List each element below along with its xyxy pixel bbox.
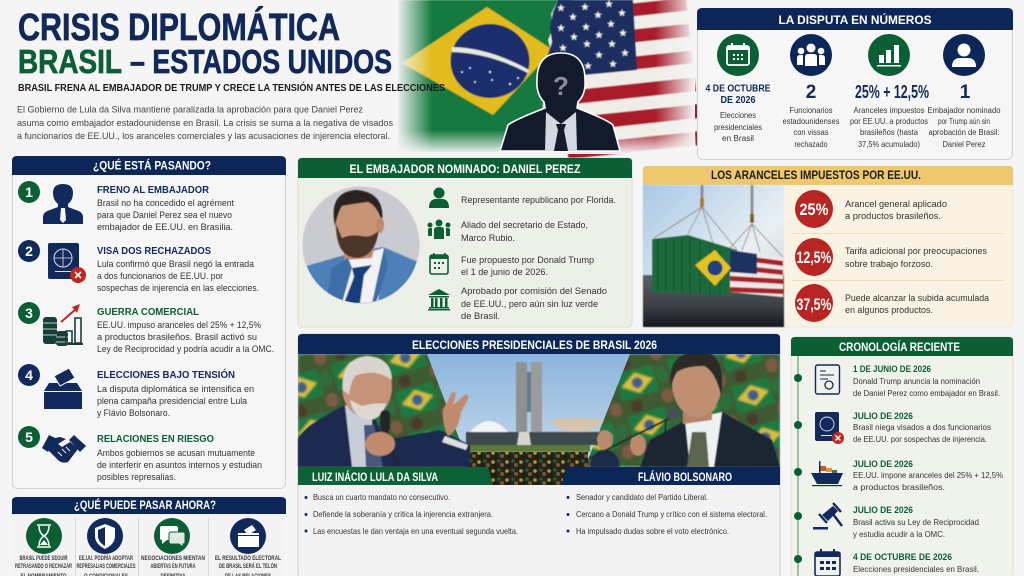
panel: qué puede pasar ahora: ¿QUÉ PUEDE PASAR AHORA?	[74, 497, 216, 512]
tariff 37,5%: Puede alcanzar la subida acumulada	[845, 293, 989, 303]
tariff 25%	[795, 190, 947, 228]
item 3: guerra comercial: EE.UU. impuso aranceles del 25% + 12,5%	[97, 320, 261, 330]
hero image: Brazil and US flags with silhouette	[396, 0, 702, 159]
title	[18, 5, 392, 80]
stat: officials	[782, 82, 840, 149]
bullets: Bolsonaro: Senador y candidato del Partido Liberal.	[576, 493, 708, 502]
stat: tariffs: por EE.UU. a productos	[850, 117, 928, 126]
item 1: freno al embajador: FRENO AL EMBAJADOR	[97, 184, 209, 196]
event: 1 de junio: de Daniel Perez como embajador en Brasil.	[853, 389, 1000, 398]
item 1: freno al embajador: embajador de EE.UU. en Brasilia.	[97, 222, 233, 232]
icon: calendar	[717, 34, 759, 76]
icon: representative	[429, 188, 449, 208]
icon: bar chart	[868, 34, 910, 76]
item 2: visados rechazados	[18, 240, 259, 293]
stat: tariffs: Aranceles impuestos	[854, 106, 924, 115]
stat: ambassador	[928, 82, 1001, 149]
stat: election date: DE 2026	[720, 94, 756, 106]
item 1: freno al embajador	[18, 181, 234, 232]
panel: embajador nominado	[298, 158, 632, 327]
panel: cronología reciente	[791, 337, 1013, 576]
portrait: Daniel Perez	[300, 186, 420, 310]
icon: nomination calendar	[430, 253, 448, 274]
event: aranceles: EE.UU. impone aranceles del 25% + 12,5%	[853, 471, 1003, 480]
fact: aprobado	[461, 286, 607, 321]
tariff 12,5%: 12,5%	[796, 248, 832, 267]
event: visados	[794, 411, 991, 444]
panel: embajador nominado: EL EMBAJADOR NOMINADO: DANIEL PEREZ	[350, 162, 580, 176]
stat: ambassador: aprobación de Brasil:	[928, 128, 1000, 137]
panel: la disputa en números	[697, 8, 1013, 160]
title: CRISIS DIPLOMÁTICA	[18, 5, 340, 49]
scenario: resultado electoral	[215, 518, 281, 576]
icon: allies group	[428, 220, 450, 239]
item 1: freno al embajador: 1	[25, 184, 33, 200]
bullets: Lula: Las encuestas le dan ventaja en una eventual segunda vuelta.	[313, 527, 518, 536]
fact: propuesto: el 1 de junio de 2026.	[461, 267, 548, 277]
item 4: elecciones bajo tensión: y Flávio Bolsonaro.	[97, 408, 170, 418]
scenario: represalias: EE.UU. PODRÍA ADOPTAR	[79, 554, 133, 562]
bullets: Lula: Defiende la soberanía y critica la injerencia extranjera.	[313, 510, 493, 519]
item 4: elecciones bajo tensión: La disputa diplomática se intensifica en	[97, 384, 254, 394]
title: – ESTADOS UNIDOS	[130, 43, 392, 80]
tariff 37,5%: en algunos productos.	[845, 305, 933, 315]
Congress building	[466, 362, 604, 452]
item 5: relaciones en riesgo: 5	[25, 429, 33, 445]
scenario: represalias	[76, 518, 136, 576]
icon: group of officials	[790, 34, 832, 76]
intro paragraph	[17, 104, 393, 142]
item 2: visados rechazados: a dos funcionarios de EE.UU. por	[97, 271, 223, 281]
scenario: negociaciones: NEGOCIACIONES MIENTAN	[141, 556, 205, 562]
event: elecciones	[794, 549, 979, 576]
panel: la disputa en números: LA DISPUTA EN NÚMEROS	[778, 12, 932, 27]
silhouette with question mark	[500, 53, 620, 151]
item 5: relaciones en riesgo: posibles represalias.	[97, 472, 176, 482]
panel: elecciones presidenciales: ELECCIONES PRESIDENCIALES DE BRASIL 2026	[412, 338, 657, 352]
event: visados: Brasil niega visados a dos funcionarios	[853, 423, 991, 432]
panel: elecciones presidenciales	[298, 334, 780, 576]
stat: tariffs: 37,5% acumulado)	[858, 140, 920, 149]
tariff 37,5%: 37,5%	[796, 295, 832, 314]
stat: election date: en Brasil	[722, 134, 754, 143]
event: elecciones: 4 DE OCTUBRE DE 2026	[853, 552, 952, 563]
scenario: retraso: BRASIL PUEDE SEGUIR	[20, 556, 68, 562]
image: containers with flags	[643, 185, 784, 327]
item 4: elecciones bajo tensión: 4	[25, 367, 33, 383]
bullets: Bolsonaro	[566, 493, 767, 536]
Brazil flag	[398, 0, 573, 152]
item 2: visados rechazados: Lula confirmó que Brasil negó la entrada	[97, 259, 254, 269]
name bar: Lula	[298, 467, 493, 485]
intro paragraph: El Gobierno de Lula da Silva mantiene paralizada la aprobación para que Daniel Perez	[17, 104, 363, 116]
stat: tariffs	[850, 82, 929, 149]
item 2: visados rechazados: sospechas de injerencia en las elecciones.	[97, 283, 259, 293]
tariff 12,5%: sobre trabajo forzoso.	[845, 259, 933, 269]
fact: aliado: Aliado del secretario de Estado,	[461, 220, 588, 230]
event: reciprocidad: Brasil activa su Ley de Reciprocidad	[853, 518, 979, 527]
scenario: negociaciones: ABIERTAS EN FUTURA	[150, 564, 196, 570]
stat: election date	[706, 82, 770, 143]
fact: aprobado: Aprobado por comisión del Senado	[461, 286, 607, 296]
name bar: Flávio Bolsonaro: FLÁVIO BOLSONARO	[638, 469, 732, 484]
panel: aranceles	[643, 166, 1013, 327]
event: aranceles	[794, 459, 1003, 492]
icon: person	[943, 34, 985, 76]
event: aranceles: a productos brasileños.	[853, 483, 945, 492]
item 3: guerra comercial: GUERRA COMERCIAL	[97, 306, 200, 318]
panel: qué está pasando	[12, 156, 286, 488]
US flag	[540, 0, 702, 159]
bullets: Bolsonaro: Ha impulsado dudas sobre el voto electrónico.	[576, 527, 729, 536]
image: candidates and Congress	[298, 349, 780, 485]
event: reciprocidad	[794, 503, 979, 539]
item 2: visados rechazados: VISA DOS RECHAZADOS	[97, 245, 211, 257]
event: reciprocidad: JULIO DE 2026	[853, 505, 913, 516]
scenario: resultado electoral: DE BRASIL SERÁ EL TELÓN	[219, 562, 277, 570]
icon: senate building	[428, 289, 450, 310]
Lula	[298, 356, 470, 467]
stat: tariffs: 25% + 12,5%	[855, 82, 929, 102]
stat: election date: Elecciones	[720, 111, 756, 120]
stat: election date: presidenciales	[714, 123, 762, 132]
event: aranceles: JULIO DE 2026	[853, 459, 913, 470]
panel: qué puede pasar ahora	[12, 497, 286, 576]
stat: officials: estadounidenses	[782, 117, 840, 126]
stat: officials: rechazado	[794, 140, 828, 149]
fact: aprobado: de EE.UU., pero aún sin luz verde	[461, 299, 598, 309]
tariff 12,5%: Tarifa adicional por preocupaciones	[845, 246, 987, 256]
silhouette with question mark: ?	[553, 71, 569, 101]
item 3: guerra comercial	[18, 302, 274, 354]
tariff 37,5%	[795, 284, 989, 322]
scenario: negociaciones	[141, 518, 205, 576]
stat: ambassador: 1	[960, 82, 971, 103]
Bolsonaro	[590, 349, 780, 467]
item 4: elecciones bajo tensión	[18, 364, 254, 418]
item 5: relaciones en riesgo: Ambos gobiernos se acusan mutuamente	[97, 448, 255, 458]
event: 1 de junio: Donald Trump anuncia la nominación	[853, 377, 980, 386]
fact: representante: Representante republicano por Florida.	[461, 195, 616, 205]
name bar: Lula: LUIZ INÁCIO LULA DA SILVA	[312, 469, 438, 484]
stat: ambassador: Embajador nominado	[928, 106, 1001, 115]
intro paragraph: a funcionarios de EE.UU., los aranceles comerciales y las acusaciones de injerencia electoral.	[17, 131, 390, 142]
tariff 25%: Arancel general aplicado	[845, 199, 947, 209]
intro paragraph: asuma como embajador estadounidense en Brasil. La crisis se suma a la negativa de visados	[17, 118, 393, 129]
title: BRASIL	[18, 43, 122, 80]
fact: propuesto	[461, 255, 594, 277]
item 1: freno al embajador: para que Daniel Perez sea el nuevo	[97, 210, 232, 220]
bullets: Bolsonaro: Cercano a Donald Trump y crítico con el sistema electoral.	[576, 510, 767, 519]
scenario: retraso	[15, 518, 72, 576]
item 4: elecciones bajo tensión: plena campaña presidencial entre Lula	[97, 396, 247, 406]
stat: tariffs: brasileños (hasta	[860, 128, 919, 137]
event: 1 de junio: 1 DE JUNIO DE 2026	[853, 364, 931, 375]
item 1: freno al embajador: Brasil no ha concedido el agrément	[97, 198, 234, 208]
bullets: Lula	[304, 493, 518, 536]
fact: aprobado: de Brasil.	[461, 311, 500, 321]
name bar: Flávio Bolsonaro	[561, 467, 780, 485]
panel: qué está pasando: ¿QUÉ ESTÁ PASANDO?	[93, 158, 211, 172]
item 4: elecciones bajo tensión: ELECCIONES BAJO TENSIÓN	[97, 368, 235, 381]
scenario: represalias: REPRESALIAS COMERCIALES	[76, 564, 136, 570]
scenario: retraso: RETRASANDO O RECHAZAR	[15, 564, 72, 570]
event: visados: JULIO DE 2026	[853, 411, 913, 422]
event: visados: de EE.UU. por sospechas de injerencia.	[853, 435, 987, 444]
item 5: relaciones en riesgo	[18, 426, 262, 482]
scenario: resultado electoral: EL RESULTADO ELECTORAL	[215, 556, 281, 562]
stat: officials: con vissas	[794, 128, 828, 137]
subtitle: BRASIL FRENA AL EMBAJADOR DE TRUMP Y CRECE LA TENSIÓN ANTES DE LAS ELECCIONES	[18, 81, 445, 94]
tariff 25%: 25%	[800, 200, 828, 219]
stat: election date: 4 DE OCTUBRE	[706, 82, 770, 94]
item 3: guerra comercial: Ley de Reciprocidad y podría acudir a la OMC.	[97, 344, 274, 354]
stat: officials: 2	[806, 82, 816, 103]
item 5: relaciones en riesgo: RELACIONES EN RIESGO	[97, 433, 214, 445]
item 3: guerra comercial: 3	[25, 305, 33, 321]
fact: aliado	[461, 220, 588, 243]
stat: officials: Funcionarios	[790, 106, 832, 115]
item 3: guerra comercial: a productos brasileños. Brasil activó su	[97, 332, 257, 342]
fact: propuesto: Fue propuesto por Donald Trump	[461, 255, 594, 265]
item 2: visados rechazados: 2	[25, 243, 33, 259]
item 5: relaciones en riesgo: de interferir en asuntos internos y estudian	[97, 460, 262, 470]
tariff 25%: a productos brasileños.	[845, 211, 941, 221]
stat: ambassador: por Trump aún sin	[938, 117, 990, 126]
event: elecciones: Elecciones presidenciales en Brasil.	[853, 565, 979, 574]
stat: ambassador: Daniel Perez	[942, 140, 986, 149]
event: 1 de junio	[794, 364, 1000, 398]
tariff 12,5%	[795, 238, 987, 276]
panel: aranceles: LOS ARANCELES IMPUESTOS POR EE.UU.	[711, 168, 921, 182]
panel: cronología reciente: CRONOLOGÍA RECIENTE	[839, 339, 960, 354]
fact: aliado: Marco Rubio.	[461, 233, 515, 243]
event: reciprocidad: y estudia acudir a la OMC.	[853, 530, 945, 539]
bullets: Lula: Busca un cuarto mandato no consecutivo.	[313, 493, 450, 502]
